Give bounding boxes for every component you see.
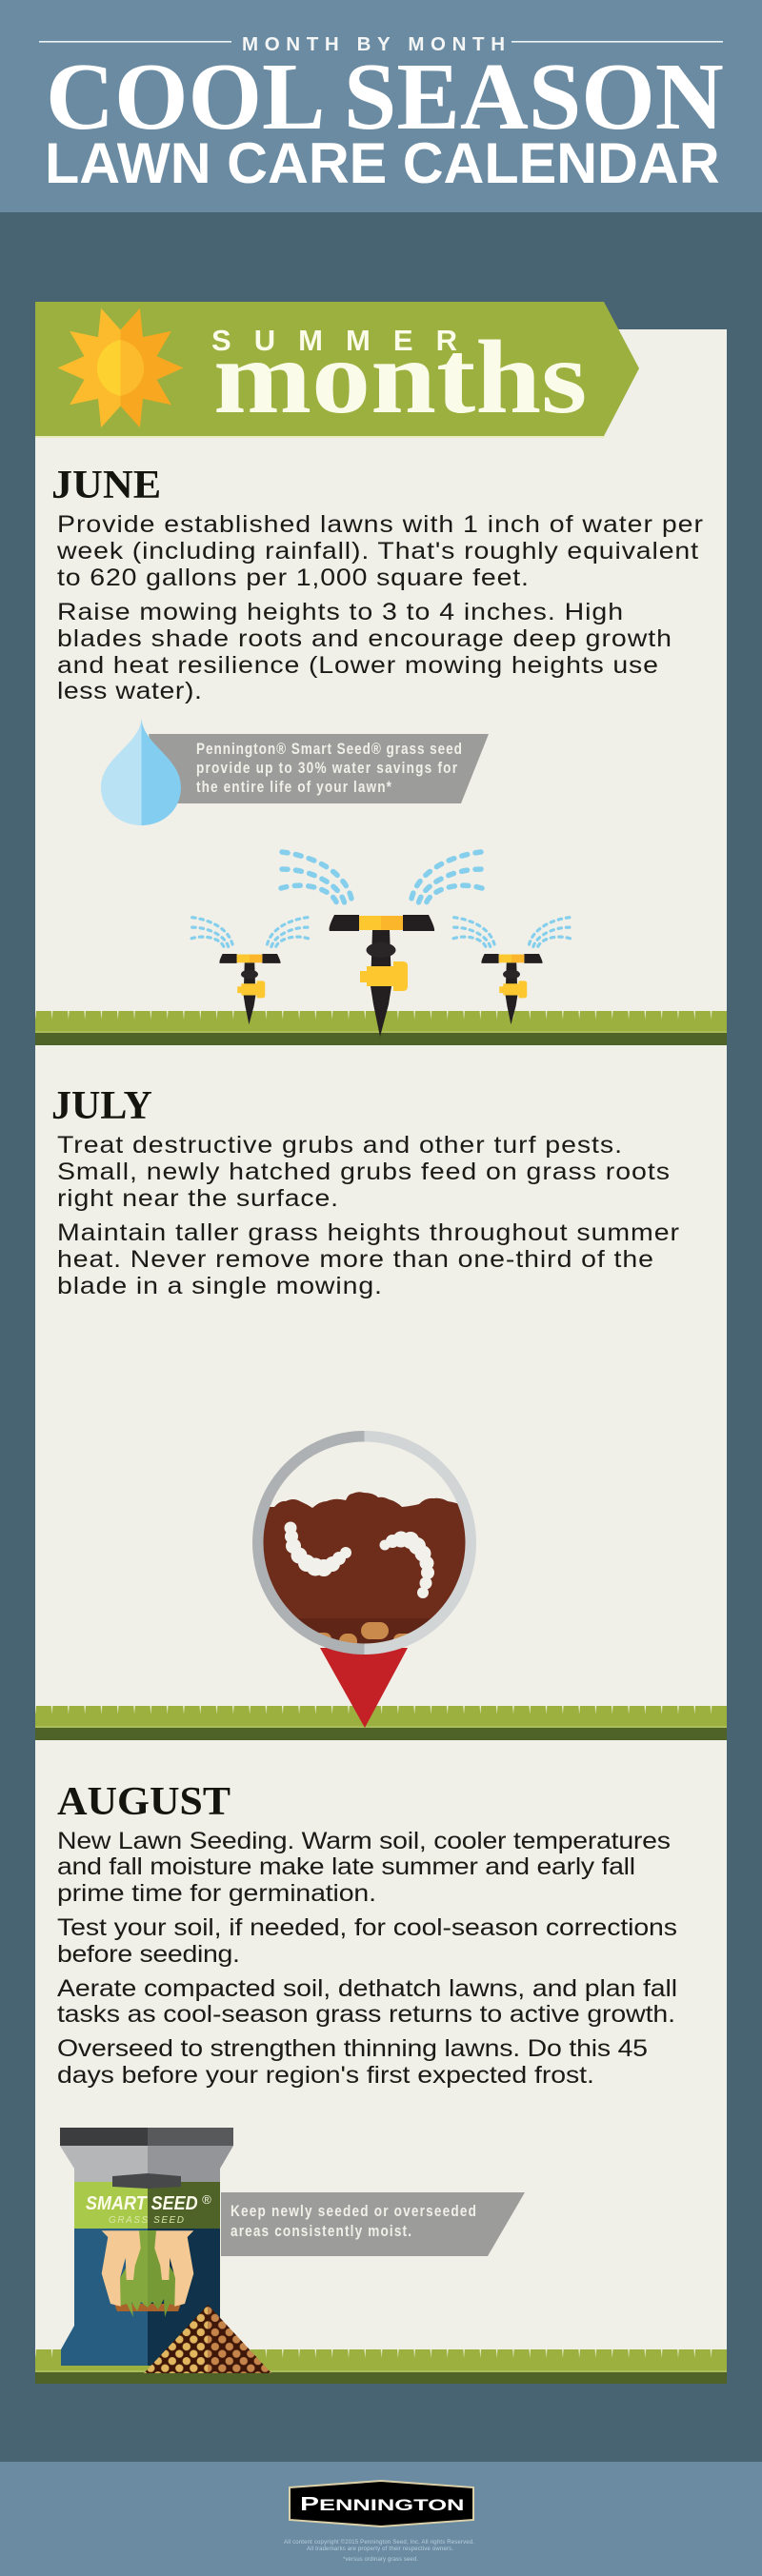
illustration: seed pile — [144, 2305, 271, 2373]
text block: August advice: Overseed to strengthen thinning lawns. Do this 45 — [57, 2035, 648, 2062]
lawn strip: June — [35, 1011, 727, 1045]
panel: summer months background — [35, 329, 727, 2384]
bag label: Smart Seed: SMART SEED — [86, 2193, 198, 2214]
callout: keep moist — [221, 2192, 525, 2256]
grub: left — [284, 1521, 351, 1576]
text block: July advice: Treat destructive grubs and other turf pests. — [57, 1132, 622, 1159]
text block: June advice: and heat resilience (Lower mowing heights use — [57, 652, 658, 679]
text block: July advice: right near the surface. — [57, 1185, 338, 1212]
footer band — [0, 2462, 762, 2576]
heading: June: JUNE — [51, 464, 161, 507]
illustration: seed bag: ® — [202, 2192, 211, 2207]
text block: August advice: tasks as cool-season grass returns to active growth. — [57, 2001, 675, 2028]
text block: August advice: days before your region's first expected frost. — [57, 2062, 594, 2089]
text block: August advice: and fall moisture make late summer and early fall — [57, 1853, 635, 1880]
banner: summer months — [35, 302, 639, 438]
illustration: seed bag — [60, 2128, 233, 2366]
icon: water drop — [101, 718, 181, 825]
legal text — [284, 2539, 474, 2563]
text block: June advice: blades shade roots and encourage deep growth — [57, 625, 672, 652]
text block: July advice — [57, 1132, 679, 1299]
lawn strip: August — [35, 2349, 727, 2384]
kicker: month by month: MONTH BY MONTH — [242, 33, 505, 55]
callout text — [231, 2203, 476, 2240]
banner word: summer: SUMMER — [211, 324, 457, 357]
text block: July advice: Maintain taller grass heights throughout summer — [57, 1219, 679, 1246]
icon: right small sprinkler — [453, 918, 570, 1024]
legal text: All trademarks are property of their respective owners. — [307, 2546, 453, 2552]
text block: August advice: Aerate compacted soil, dethatch lawns, and plan fall — [57, 1975, 677, 2002]
legal text: All content copyright ©2015 Pennington Seed, Inc. All rights Reserved. — [284, 2539, 474, 2546]
icon: sun — [57, 308, 183, 427]
lawn strip: July — [35, 1706, 727, 1740]
text block: August advice: prime time for germination. — [57, 1880, 376, 1907]
text block: August advice — [57, 1828, 677, 2089]
legal text: *versus ordinary grass seed. — [343, 2557, 418, 2563]
icon: left small sprinkler — [191, 918, 308, 1024]
text block: June advice: Provide established lawns with 1 inch of water per — [57, 511, 703, 538]
icon: large sprinkler — [281, 852, 482, 1037]
text block: July advice: Small, newly hatched grubs feed on grass roots — [57, 1159, 670, 1185]
header band — [0, 0, 762, 212]
pin point — [320, 1648, 408, 1728]
subtitle: lawn care calendar: LAWN CARE CALENDAR — [45, 131, 720, 195]
text block: June advice — [56, 511, 703, 704]
text block: August advice: Test your soil, if needed, for cool-season corrections — [57, 1914, 677, 1941]
logo: Pennington — [290, 2481, 473, 2526]
grub: right — [379, 1531, 434, 1598]
bag label: grass seed: GRASS SEED — [109, 2215, 184, 2226]
callout text: areas consistently moist. — [231, 2223, 411, 2240]
callout text: Pennington® Smart Seed® grass seed — [196, 741, 462, 758]
text block: June advice: to 620 gallons per 1,000 square feet. — [57, 565, 529, 591]
title: cool season: COOL SEASON — [46, 43, 724, 149]
text block: August advice: New Lawn Seeding. Warm soil, cooler temperatures — [57, 1828, 671, 1854]
text block: July advice: blade in a single mowing. — [57, 1273, 382, 1299]
soil cutaway — [263, 1492, 465, 1643]
text block: July advice: heat. Never remove more than one-third of the — [57, 1246, 653, 1273]
icon: hands holding grass plug — [102, 2230, 193, 2317]
callout text — [196, 741, 462, 796]
logo: Pennington: PENNINGTON — [300, 2494, 464, 2515]
text block: June advice: week (including rainfall). That's roughly equivalent — [56, 538, 699, 565]
heading: July: JULY — [51, 1084, 152, 1128]
callout text: the entire life of your lawn* — [196, 779, 391, 796]
text block: June advice: Raise mowing heights to 3 to 4 inches. High — [57, 599, 623, 625]
callout text: provide up to 30% water savings for — [196, 760, 457, 777]
illustration: grubs under magnifier pin — [257, 1437, 471, 1728]
callout text: Keep newly seeded or overseeded — [231, 2203, 476, 2220]
banner word: months: months — [213, 320, 587, 435]
callout: water savings — [101, 718, 489, 825]
magnifier ring — [258, 1437, 471, 1649]
text block: June advice: less water). — [57, 678, 202, 704]
heading: August: AUGUST — [57, 1780, 231, 1824]
text block: August advice: before seeding. — [57, 1941, 240, 1968]
